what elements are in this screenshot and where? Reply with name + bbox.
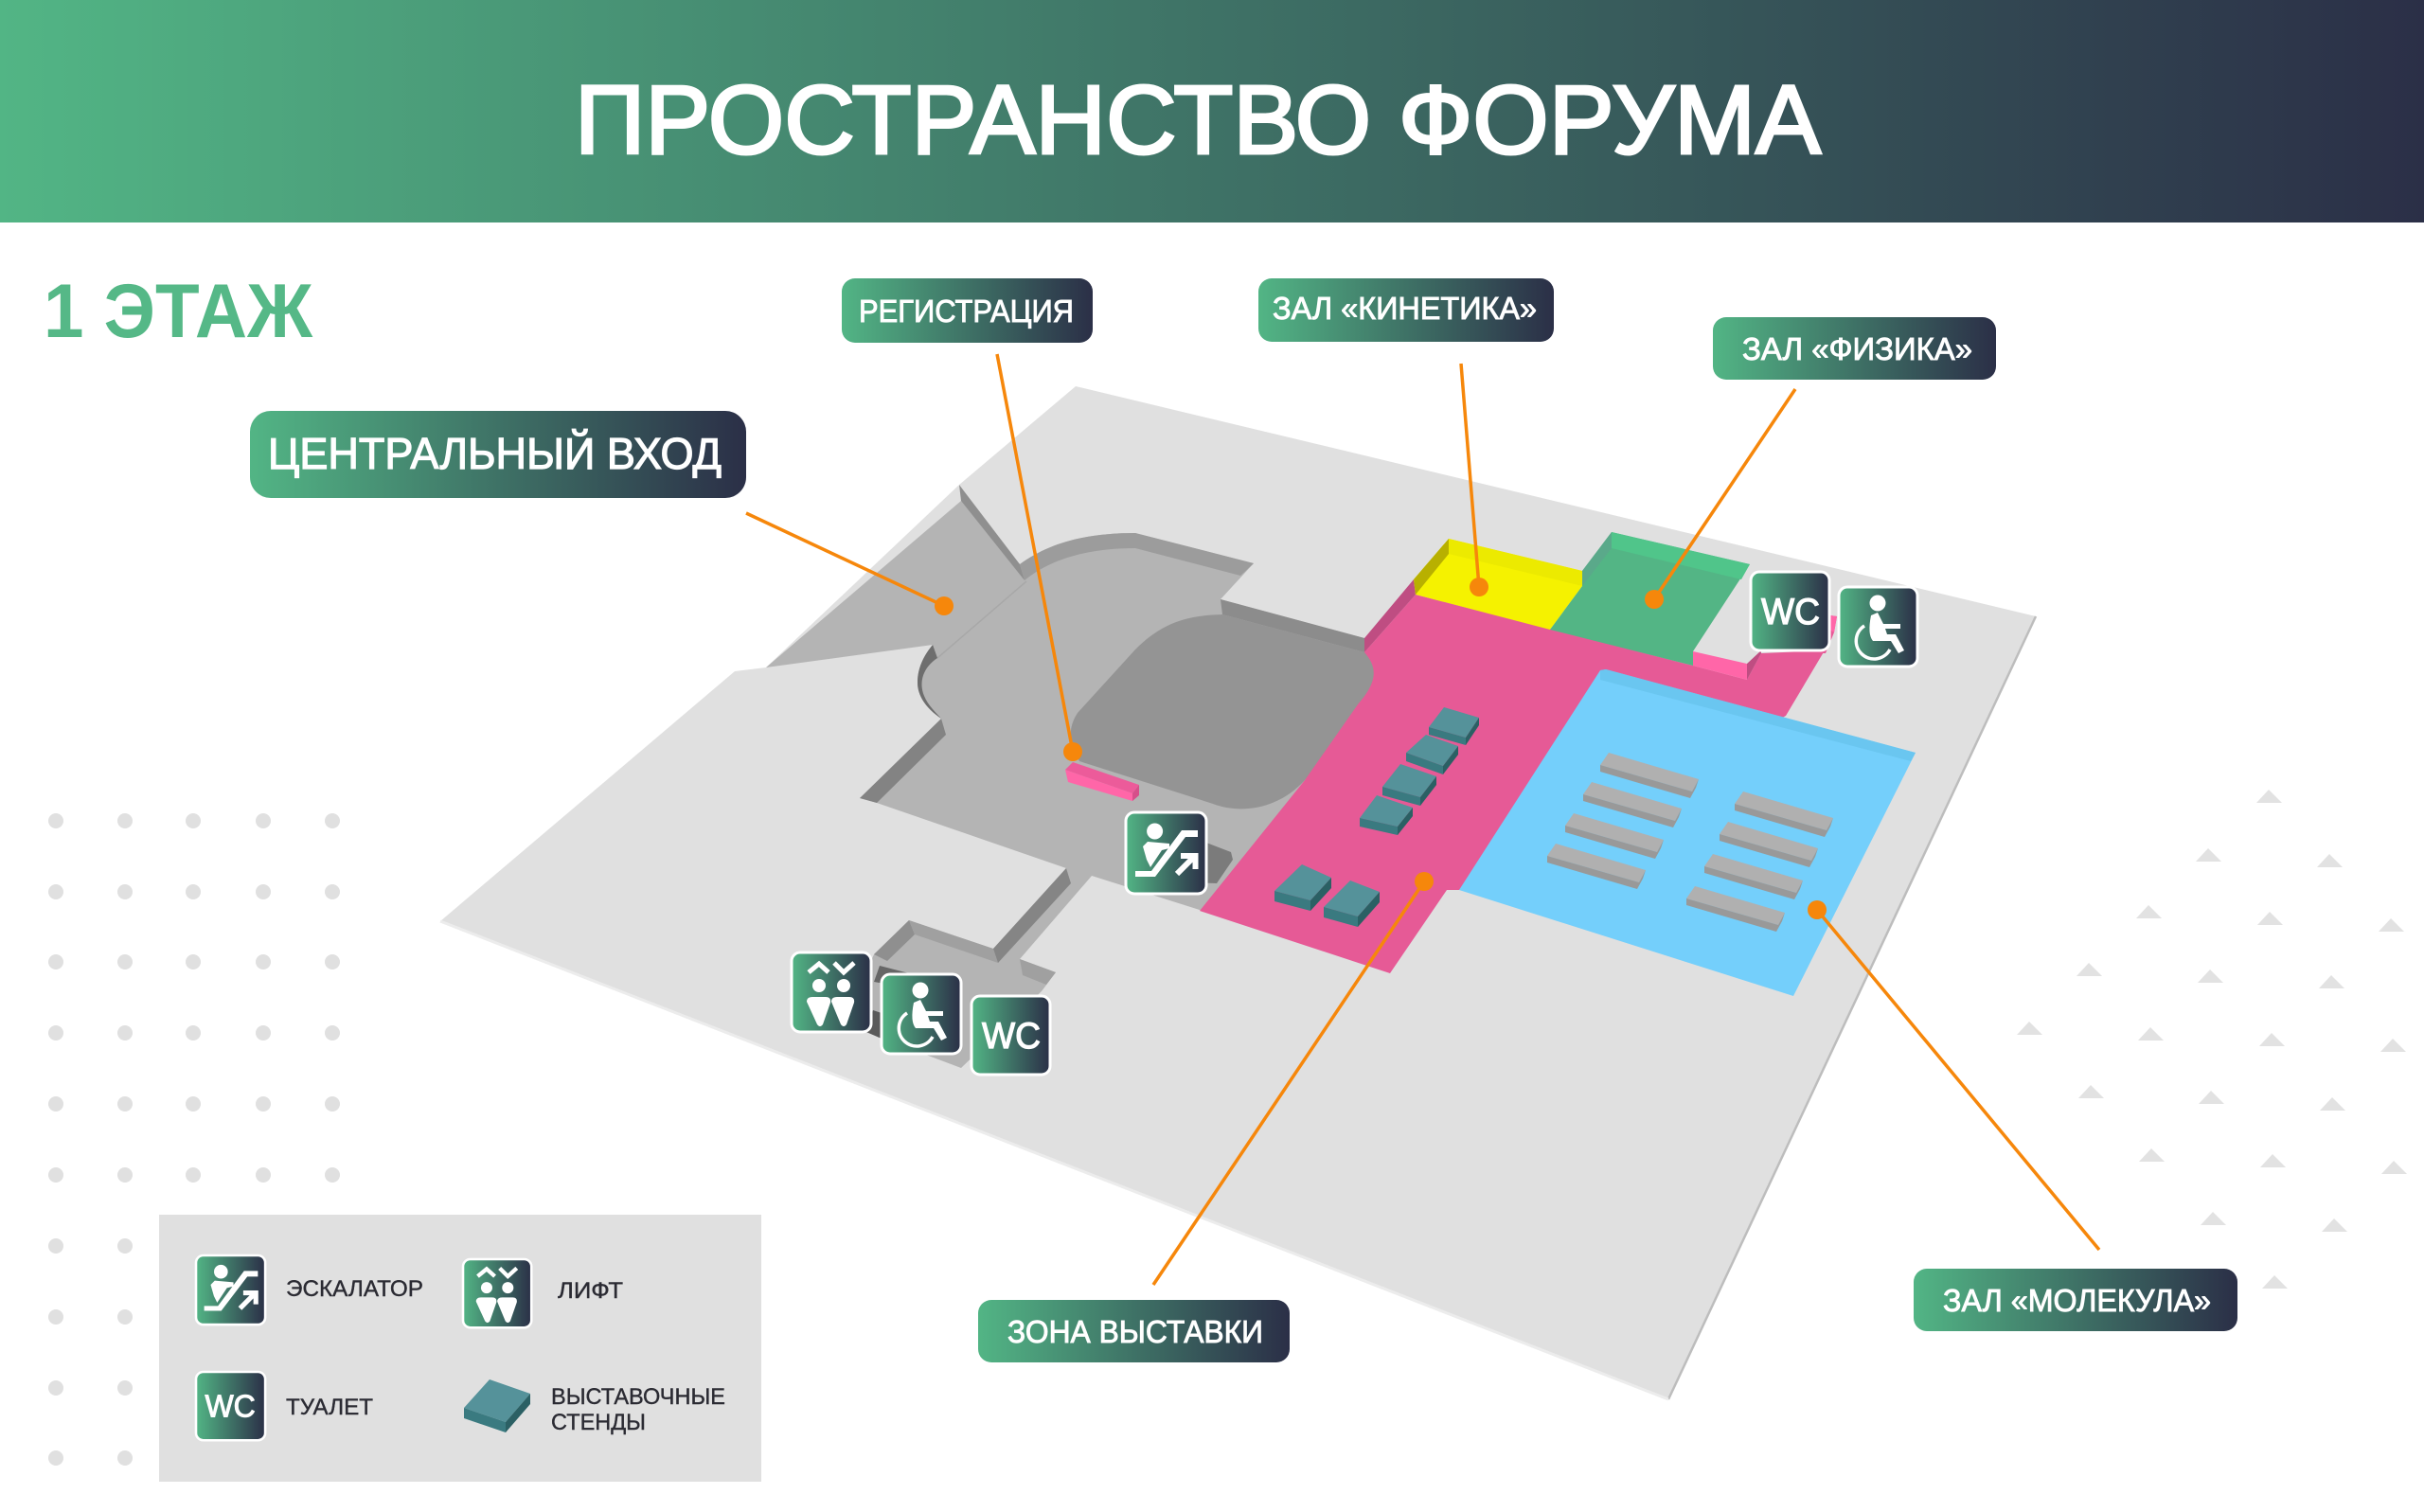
icon: wheelchair bbox=[882, 974, 961, 1054]
leader lines bbox=[746, 354, 2099, 1285]
icon: wc right: WC bbox=[1761, 592, 1820, 632]
label: central entrance bbox=[250, 411, 746, 498]
label: registration bbox=[842, 278, 1093, 343]
header banner bbox=[0, 0, 2424, 222]
icon: wc right bbox=[1751, 572, 1829, 650]
label: registration: РЕГИСТРАЦИЯ bbox=[859, 294, 1074, 329]
legend: elevator bbox=[463, 1259, 623, 1327]
label: exhibition zone: ЗОНА ВЫСТАВКИ bbox=[1007, 1314, 1263, 1349]
label: kinetika: ЗАЛ «КИНЕТИКА» bbox=[1273, 291, 1537, 326]
hall: molekula bbox=[1459, 669, 1916, 996]
exhibition zone bbox=[1200, 595, 1825, 973]
legend: elevator: ЛИФТ bbox=[558, 1278, 623, 1304]
lobby walls bbox=[860, 485, 1364, 1039]
dot pattern bbox=[48, 813, 340, 1466]
label: fizika: ЗАЛ «ФИЗИКА» bbox=[1742, 331, 1972, 366]
floor heading: 1 ЭТАЖ bbox=[44, 269, 313, 354]
registration desk bbox=[1065, 762, 1139, 801]
pink side walls bbox=[1364, 579, 1837, 680]
label: molekula bbox=[1914, 1269, 2237, 1331]
lobby floor bbox=[766, 501, 1364, 1068]
label: fizika bbox=[1713, 317, 1996, 380]
legend: toilet: WC bbox=[205, 1389, 256, 1424]
line: molekula bbox=[1808, 900, 2099, 1250]
legend: escalator bbox=[196, 1255, 423, 1325]
line: kinetika bbox=[1461, 364, 1488, 596]
line: registration bbox=[997, 354, 1082, 761]
label: central entrance: ЦЕНТРАЛЬНЫЙ ВХОД bbox=[268, 429, 722, 478]
icon: wheelchair right bbox=[1839, 587, 1917, 667]
line: central entrance bbox=[746, 513, 954, 615]
exhibition stands bbox=[1274, 707, 1479, 927]
title: ПРОСТРАНСТВО ФОРУМА bbox=[575, 65, 1821, 174]
legend: exhibition stand bbox=[464, 1379, 725, 1435]
icon: wc: WC bbox=[982, 1016, 1041, 1057]
icon: wc bbox=[971, 996, 1050, 1075]
hall: kinetika bbox=[1414, 539, 1582, 630]
building floor slab bbox=[440, 386, 2036, 1399]
legend: toilet: ТУАЛЕТ bbox=[286, 1395, 373, 1420]
label: molekula: ЗАЛ «МОЛЕКУЛА» bbox=[1943, 1283, 2211, 1318]
icon: escalator bbox=[1126, 812, 1206, 894]
legend: exhibition stand: ВЫСТАВОЧНЫЕ bbox=[551, 1384, 725, 1410]
central atrium bbox=[1071, 614, 1374, 809]
label: exhibition zone bbox=[978, 1300, 1290, 1362]
legend: exhibition stand: СТЕНДЫ bbox=[551, 1410, 646, 1435]
legend: toilet bbox=[196, 1372, 373, 1440]
legend: escalator: ЭСКАЛАТОР bbox=[286, 1276, 423, 1302]
line: exhibition zone bbox=[1153, 872, 1434, 1285]
seating rows bbox=[1547, 753, 1833, 932]
escalator block bbox=[1136, 824, 1233, 883]
hall: fizika bbox=[1550, 532, 1750, 666]
line: fizika bbox=[1645, 389, 1795, 609]
lobby divider bbox=[937, 581, 1026, 658]
triangle pattern bbox=[2017, 790, 2407, 1289]
label: kinetika bbox=[1258, 278, 1554, 342]
floor plan bbox=[440, 386, 2036, 1399]
legend panel bbox=[159, 1215, 761, 1482]
icon: elevator bbox=[792, 952, 871, 1032]
